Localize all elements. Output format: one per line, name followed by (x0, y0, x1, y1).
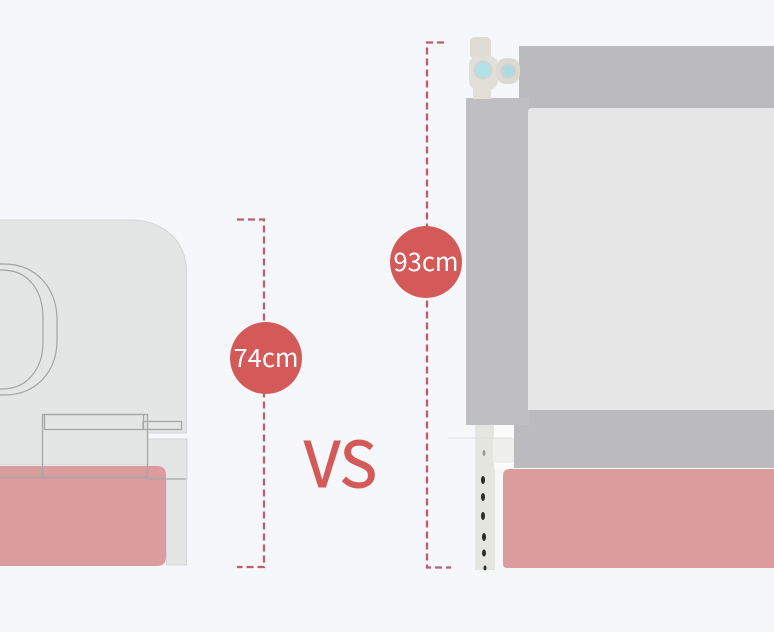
right rail fabric panel (528, 108, 774, 410)
badge: 74cm: 74cm (234, 338, 298, 375)
height bracket: 74cm (230, 220, 302, 567)
left rail mechanism outlines (0, 414, 186, 479)
height bracket: 93cm (390, 42, 462, 568)
right rail upright shading (466, 98, 529, 425)
left rail lower bracket (148, 439, 187, 479)
left rail window outlines (0, 264, 57, 395)
badge: 74cm (230, 322, 302, 394)
left pink mattress (0, 466, 166, 566)
blue hinge buttons (474, 60, 492, 80)
left rail panel (0, 220, 186, 465)
left product: low bed rail on mattress (0, 220, 187, 566)
right pink mattress (503, 469, 774, 568)
badge: 93cm (390, 226, 462, 298)
right rail grey frame (466, 46, 774, 468)
right product: tall bed rail on mattress (448, 37, 774, 570)
hinge mechanism (469, 37, 520, 99)
VS label: VS (304, 415, 377, 506)
badge: 93cm: 93cm (394, 242, 458, 279)
left rail leg (166, 479, 186, 565)
right rail adjustable leg (448, 425, 514, 570)
